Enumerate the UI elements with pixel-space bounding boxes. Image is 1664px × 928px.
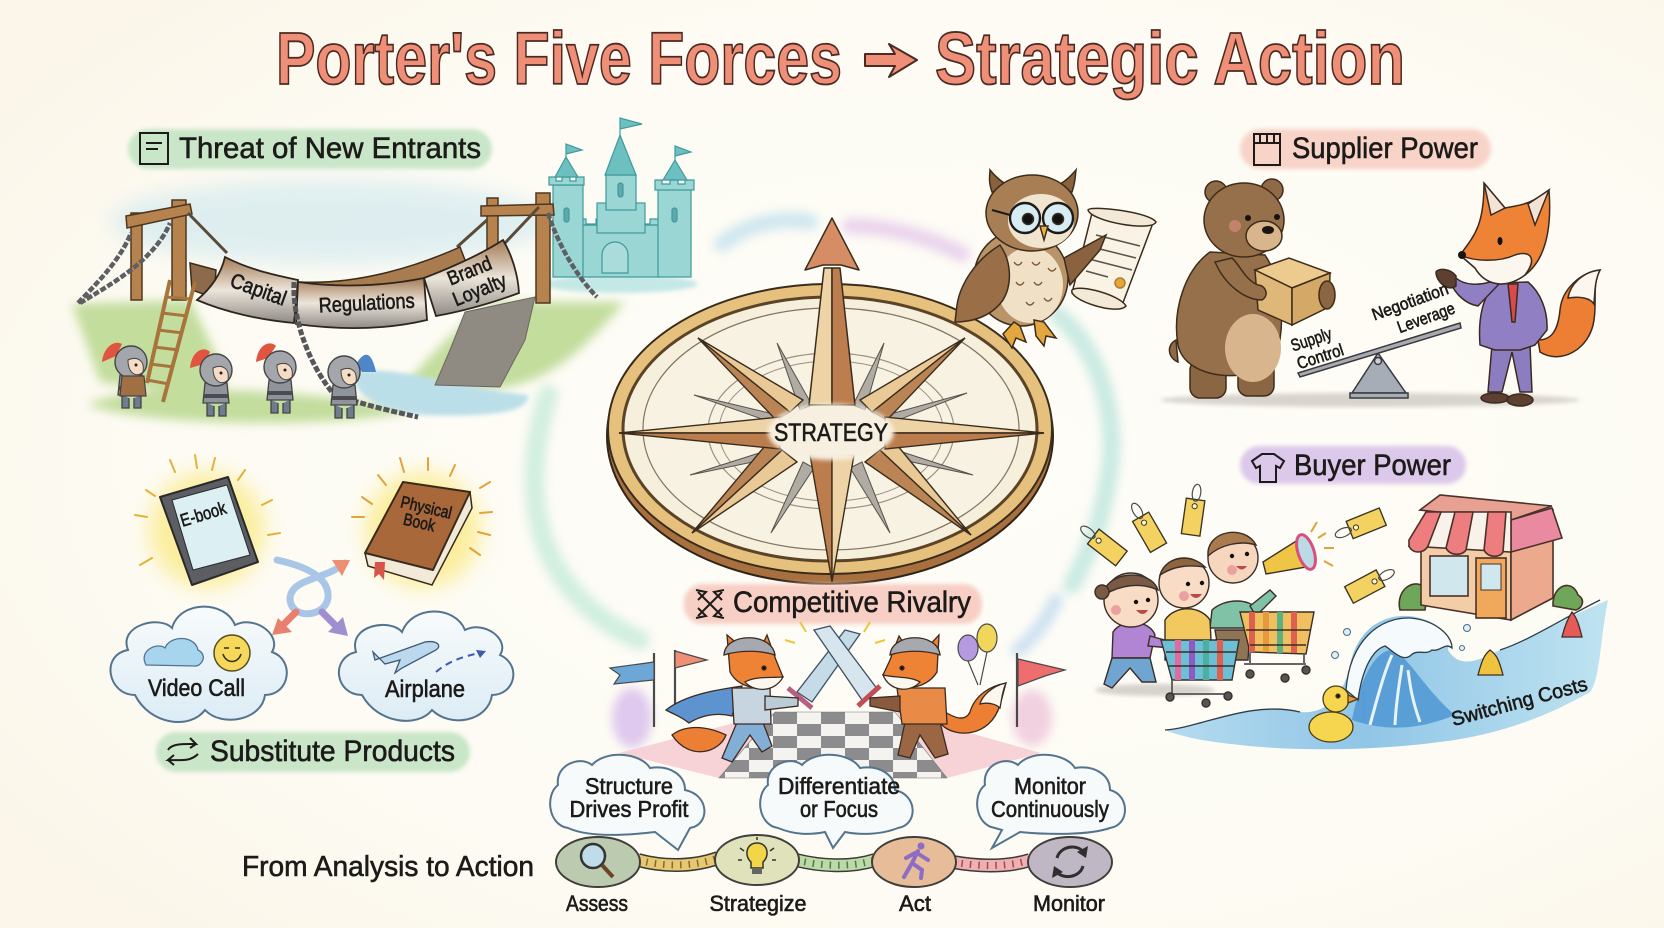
flags and balloons [610, 624, 1065, 727]
seesaw labels: Control [1295, 340, 1346, 373]
step labels: Act [899, 891, 931, 916]
banner: Brand Loyalty: Brand [444, 253, 495, 290]
purple wash [612, 688, 652, 748]
speech bubble: Structure Drives Profit: Structure [585, 773, 673, 799]
step labels: Assess [566, 891, 628, 916]
speech bubble: Differentiate or Focus: or Focus [800, 796, 878, 822]
river [354, 371, 528, 416]
e-book tablet: E-book [178, 498, 229, 531]
seesaw [1298, 323, 1461, 398]
banner: Brand Loyalty: Loyalty [450, 270, 510, 311]
cloud: Airplane: Airplane [385, 676, 465, 703]
heading pill: Substitute Products [156, 732, 470, 772]
heading pill: Substitute Products: Substitute Products [210, 735, 455, 768]
step labels: Monitor [1033, 891, 1105, 916]
seesaw labels: Negotiation [1369, 279, 1451, 324]
banner: Regulations: Regulations [318, 290, 415, 318]
rock cliff [435, 297, 535, 387]
castle [542, 118, 698, 293]
heading pill: Buyer Power [1240, 446, 1466, 484]
substitution arrows [272, 560, 350, 636]
cart two [1240, 612, 1314, 654]
panel: supplier power [1160, 129, 1600, 407]
checkered arena floor [619, 712, 1041, 778]
shoppers and carts [1095, 522, 1334, 707]
title [276, 17, 1405, 100]
panel: central compass [607, 170, 1156, 584]
step labels [566, 891, 1105, 916]
heading pill: Threat of New Entrants: Threat of New Entrants [179, 132, 481, 165]
panel: substitute products [110, 455, 513, 772]
support posts and beams [126, 193, 554, 303]
third shopper [1210, 601, 1262, 628]
speech bubble: Differentiate or Focus: Differentiate [778, 773, 900, 799]
middle shopper [1165, 609, 1212, 660]
store [1399, 495, 1582, 620]
compass centre: STRATEGY [768, 404, 894, 460]
compass secondary points [690, 343, 973, 533]
icon: title arrow [865, 44, 917, 77]
step labels: Strategize [710, 891, 806, 916]
node: Strategize [715, 835, 799, 885]
physical book [352, 458, 492, 588]
crossed swords [785, 622, 885, 708]
buoys [1478, 612, 1582, 675]
physical book: Book [402, 510, 437, 536]
label: Switching Costs: Switching Costs [1449, 673, 1590, 731]
compass dial [607, 284, 1053, 584]
speech bubble: Monitor Continuously: Continuously [991, 796, 1109, 822]
fox in purple suit [1436, 183, 1600, 406]
heading: From Analysis to Action: From Analysis to Action [242, 851, 534, 883]
scroll [1072, 213, 1153, 308]
heading pill: Supplier Power: Supplier Power [1292, 132, 1478, 165]
seesaw labels [1288, 279, 1458, 373]
banner: Regulations [296, 278, 427, 328]
grass banks [72, 300, 625, 423]
node: Monitor [1028, 837, 1112, 887]
node: Act [872, 837, 956, 887]
cloud: Video Call: Video Call [148, 675, 245, 702]
cloud: Video Call [110, 607, 287, 722]
hanging chain [294, 282, 418, 417]
arrow pointing north [805, 218, 859, 405]
heading pill: Competitive Rivalry: Competitive Rivalry [733, 586, 971, 619]
swirl washes around the compass [534, 220, 1111, 650]
heading pill: Buyer Power: Buyer Power [1294, 449, 1451, 482]
speech bubble: Structure Drives Profit [550, 755, 704, 850]
speech bubble: Monitor Continuously [977, 755, 1125, 848]
banner: Brand Loyalty [424, 240, 519, 316]
banner: Capital: Capital [227, 269, 289, 311]
switching-cost wave [1165, 600, 1608, 749]
speech bubble: Monitor Continuously: Monitor [1014, 773, 1086, 799]
node: Assess [556, 837, 640, 887]
heading pill: Supplier Power [1240, 129, 1491, 169]
ground shadow [1160, 393, 1580, 407]
knights [102, 343, 376, 418]
compass main points [619, 338, 1044, 582]
speech bubble: Structure Drives Profit: Drives Profit [570, 796, 689, 822]
speech bubble: Differentiate or Focus [760, 755, 913, 848]
e-book tablet [135, 455, 280, 588]
bear holding box [1169, 179, 1335, 398]
owl with scroll [955, 170, 1156, 348]
bridge deck [300, 247, 468, 298]
heading pill: Competitive Rivalry [684, 584, 982, 624]
cloud: Airplane [339, 611, 513, 721]
sky wash [110, 180, 550, 264]
title: Strategic Action [935, 17, 1405, 100]
title: Porter's Five Forces [276, 17, 842, 100]
banner: Capital [197, 257, 298, 323]
connector ropes [638, 858, 1030, 866]
heading pill: Threat of New Entrants [128, 129, 492, 169]
panel: from analysis to action [242, 835, 1112, 916]
price tags [1075, 483, 1398, 603]
rubber duck [1309, 686, 1358, 742]
fox knight left [666, 635, 798, 762]
ladder [147, 280, 195, 402]
seesaw labels: Leverage [1395, 299, 1458, 337]
chains and ropes [78, 207, 597, 303]
fox knight right [870, 635, 1006, 758]
girl [1112, 623, 1155, 658]
physical book: Physical [399, 493, 454, 523]
panel: threat of new entrants [72, 118, 698, 423]
compass centre: STRATEGY: STRATEGY [774, 419, 888, 447]
panel: buyer power [1075, 446, 1608, 749]
panel: competitive rivalry [550, 584, 1125, 850]
megaphone [1263, 538, 1312, 574]
cart one [1161, 640, 1239, 680]
seesaw labels: Supply [1288, 324, 1335, 355]
